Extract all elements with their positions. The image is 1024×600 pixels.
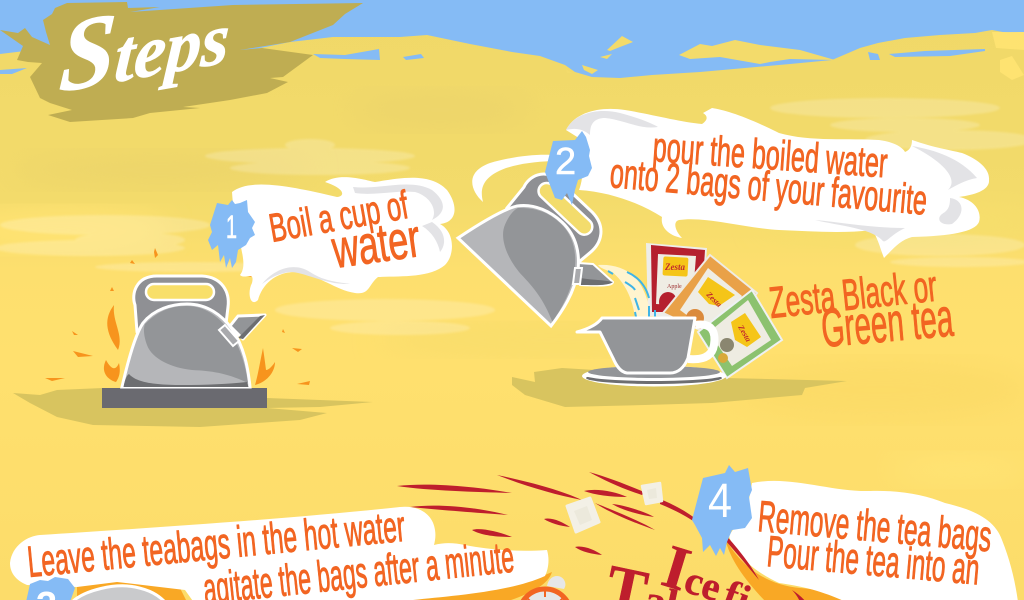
step 3: number splash: [26, 577, 75, 600]
alarm clock: [519, 576, 571, 600]
step 1: flames and sparks: [45, 248, 310, 385]
step 2: pouring kettle: [458, 157, 627, 326]
step 3: speech bubble: [10, 502, 552, 600]
step 2: cup and saucer: [577, 318, 726, 386]
steam wisps: [0, 98, 1024, 335]
tea bag: green: [698, 290, 782, 378]
step 1: number splash: 1: [226, 209, 237, 245]
step 2: ground shadow: [512, 368, 847, 407]
red streak over step 4 outline: [720, 531, 806, 600]
red headline: ice filled tall glass: [600, 532, 757, 600]
tea bag: red: Zesta: [664, 262, 685, 272]
step 4: number splash: [692, 465, 752, 556]
step 2: steam swoosh: [472, 155, 552, 202]
step 4: speech bubble: [725, 481, 1018, 600]
step 1: speech bubble: [232, 177, 455, 302]
step 4: number splash: 4: [708, 475, 732, 528]
step 2: tea bags: Zesta: [736, 323, 753, 343]
background: blue sky with brush edge: [0, 0, 1024, 80]
title brush stroke: [0, 2, 363, 122]
step 1: number splash: [208, 200, 255, 268]
tea bag: orange: Zesta: [704, 289, 724, 309]
step 2: speech bubble: [566, 108, 989, 258]
step 1: ground shadow: [13, 388, 373, 427]
step 2: water stream: [598, 265, 655, 318]
tea bag: red: Apple: [667, 284, 682, 290]
step 1: speech bubble: water: [328, 208, 424, 280]
red speed streaks: [397, 472, 700, 555]
step 2: tea label: [767, 262, 956, 359]
step 3: steeping kettle: [72, 586, 165, 600]
step 1: label text: Boil a cup of: [266, 183, 412, 251]
step 2: number splash: 2: [555, 141, 576, 183]
step 2: tea bags: [646, 243, 782, 378]
step 3: label text: Leave the teabags in the hot water: [25, 502, 407, 587]
step 2: number splash: [545, 131, 592, 205]
ice cubes: [567, 483, 662, 532]
step 1: kettle on stove: [102, 276, 267, 408]
tea bag: red: [646, 243, 707, 318]
